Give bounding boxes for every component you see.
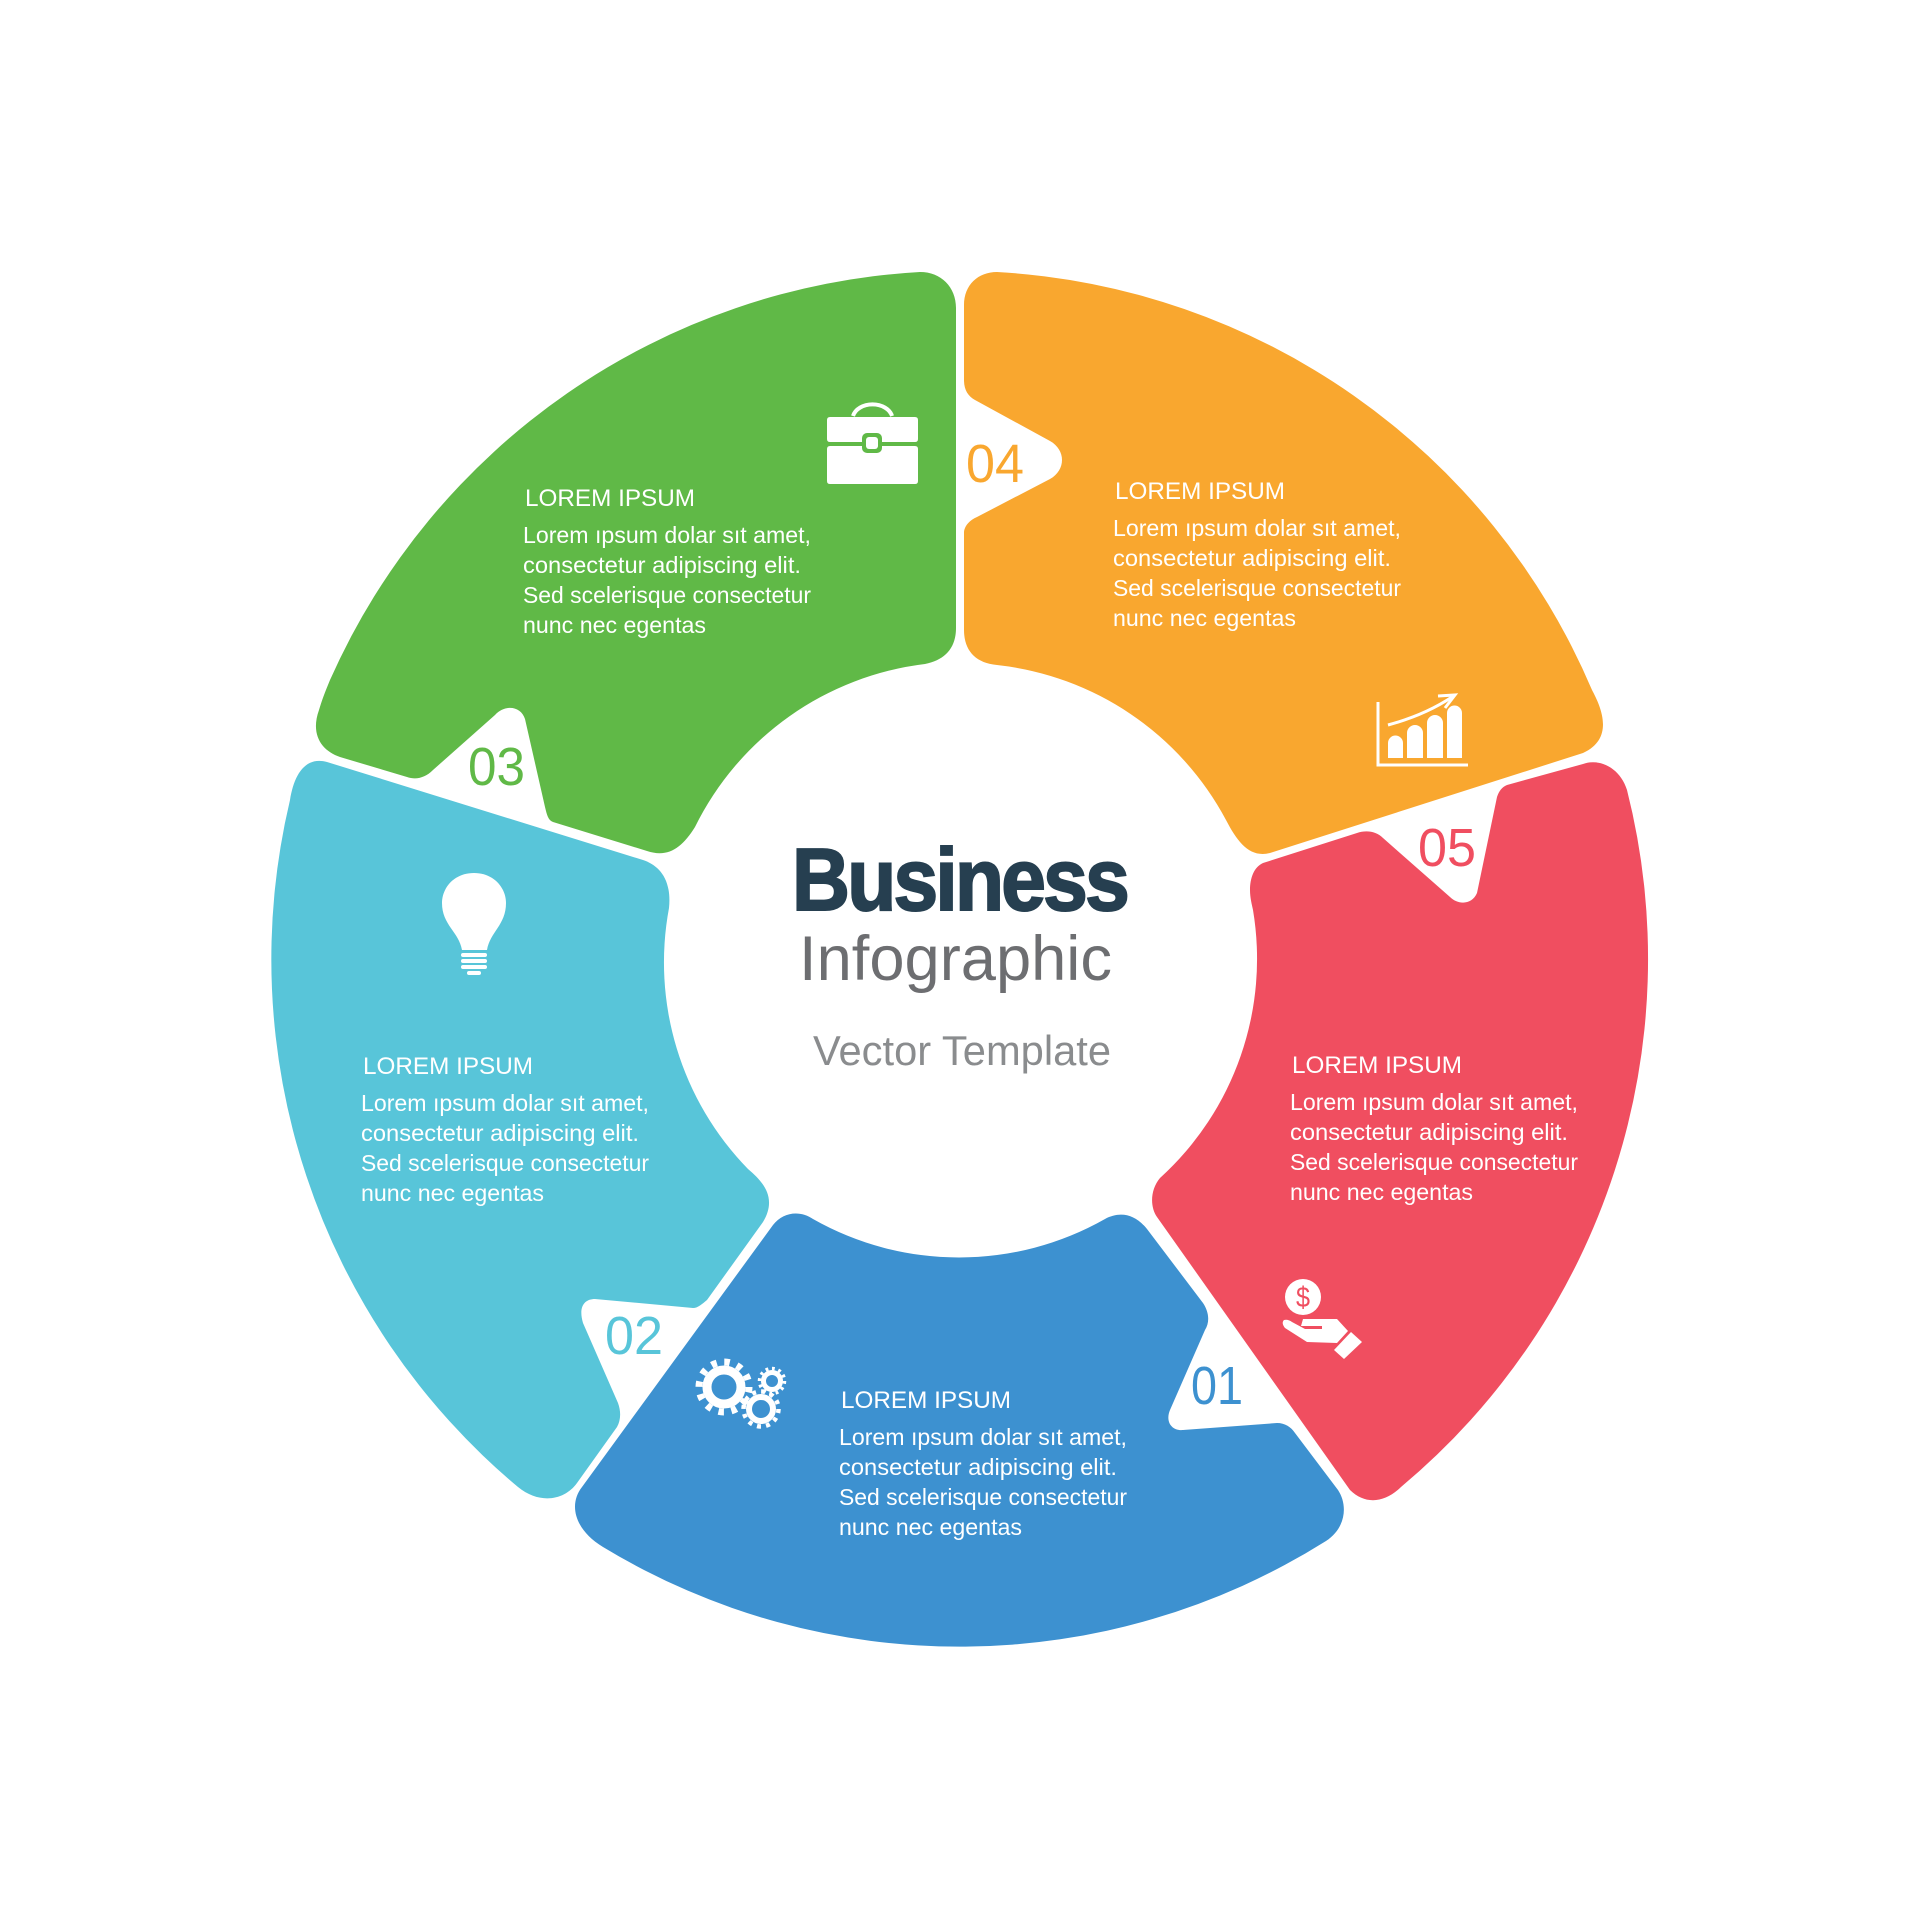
heading and body text [839,1387,1127,1540]
subtitle: Infographic: Infographic [799,924,1112,994]
heading and body text: consectetur adipiscing elit. [361,1120,639,1146]
heading and body text: nunc nec egentas [361,1180,544,1206]
heading and body text: LOREM IPSUM [525,485,695,512]
icon: light bulb [442,873,506,975]
number 04: 04 [966,434,1024,494]
heading and body text [361,1053,649,1206]
panel: teal segment 02 [271,761,769,1498]
red shape [1152,762,1648,1500]
number 03: 03 [468,737,525,797]
heading and body text: Lorem ıpsum dolar sıt amet, [1113,515,1401,541]
number 02: 02 [605,1306,663,1366]
heading and body text [523,485,811,638]
subtitle: Vector Template: Vector Template [813,1027,1111,1074]
heading and body text: nunc nec egentas [1113,605,1296,631]
title line: Business: Business [792,830,1127,929]
heading and body text: LOREM IPSUM [363,1053,533,1080]
heading and body text: LOREM IPSUM [1292,1052,1462,1079]
blue shape [575,1213,1344,1647]
heading and body text [1290,1052,1578,1205]
heading and body text: LOREM IPSUM [1115,478,1285,505]
heading and body text: LOREM IPSUM [841,1387,1011,1414]
heading and body text: Lorem ıpsum dolar sıt amet, [361,1090,649,1116]
panel: red segment 05 [1152,762,1648,1500]
heading and body text: Lorem ıpsum dolar sıt amet, [839,1424,1127,1450]
heading and body text: Sed scelerisque consectetur [523,582,811,608]
heading and body text: consectetur adipiscing elit. [1113,545,1391,571]
panel: blue segment 01 [575,1213,1344,1647]
heading and body text: Lorem ıpsum dolar sıt amet, [523,522,811,548]
heading and body text: Sed scelerisque consectetur [839,1484,1127,1510]
heading and body text: consectetur adipiscing elit. [523,552,801,578]
heading and body text: Sed scelerisque consectetur [1290,1149,1578,1175]
icon: growth chart [1378,695,1468,765]
teal shape [271,761,769,1498]
icon: hand holding coin: $ [1296,1282,1310,1314]
heading and body text: nunc nec egentas [523,612,706,638]
icon: hand holding coin [1283,1279,1362,1359]
heading and body text [1113,478,1401,631]
panel: orange segment 04 [964,272,1603,854]
title: Business Infographic Vector Template [792,830,1127,1074]
heading and body text: nunc nec egentas [839,1514,1022,1540]
orange shape [964,272,1603,854]
heading and body text: consectetur adipiscing elit. [839,1454,1117,1480]
number 01: 01 [1191,1356,1243,1416]
icon: gears [699,1362,784,1426]
heading and body text: nunc nec egentas [1290,1179,1473,1205]
heading and body text: consectetur adipiscing elit. [1290,1119,1568,1145]
heading and body text: Sed scelerisque consectetur [1113,575,1401,601]
panel: green segment 03 [316,272,956,853]
heading and body text: Sed scelerisque consectetur [361,1150,649,1176]
number 05: 05 [1418,818,1476,878]
green shape [316,272,956,853]
heading and body text: Lorem ıpsum dolar sıt amet, [1290,1089,1578,1115]
icon: briefcase [827,404,918,484]
